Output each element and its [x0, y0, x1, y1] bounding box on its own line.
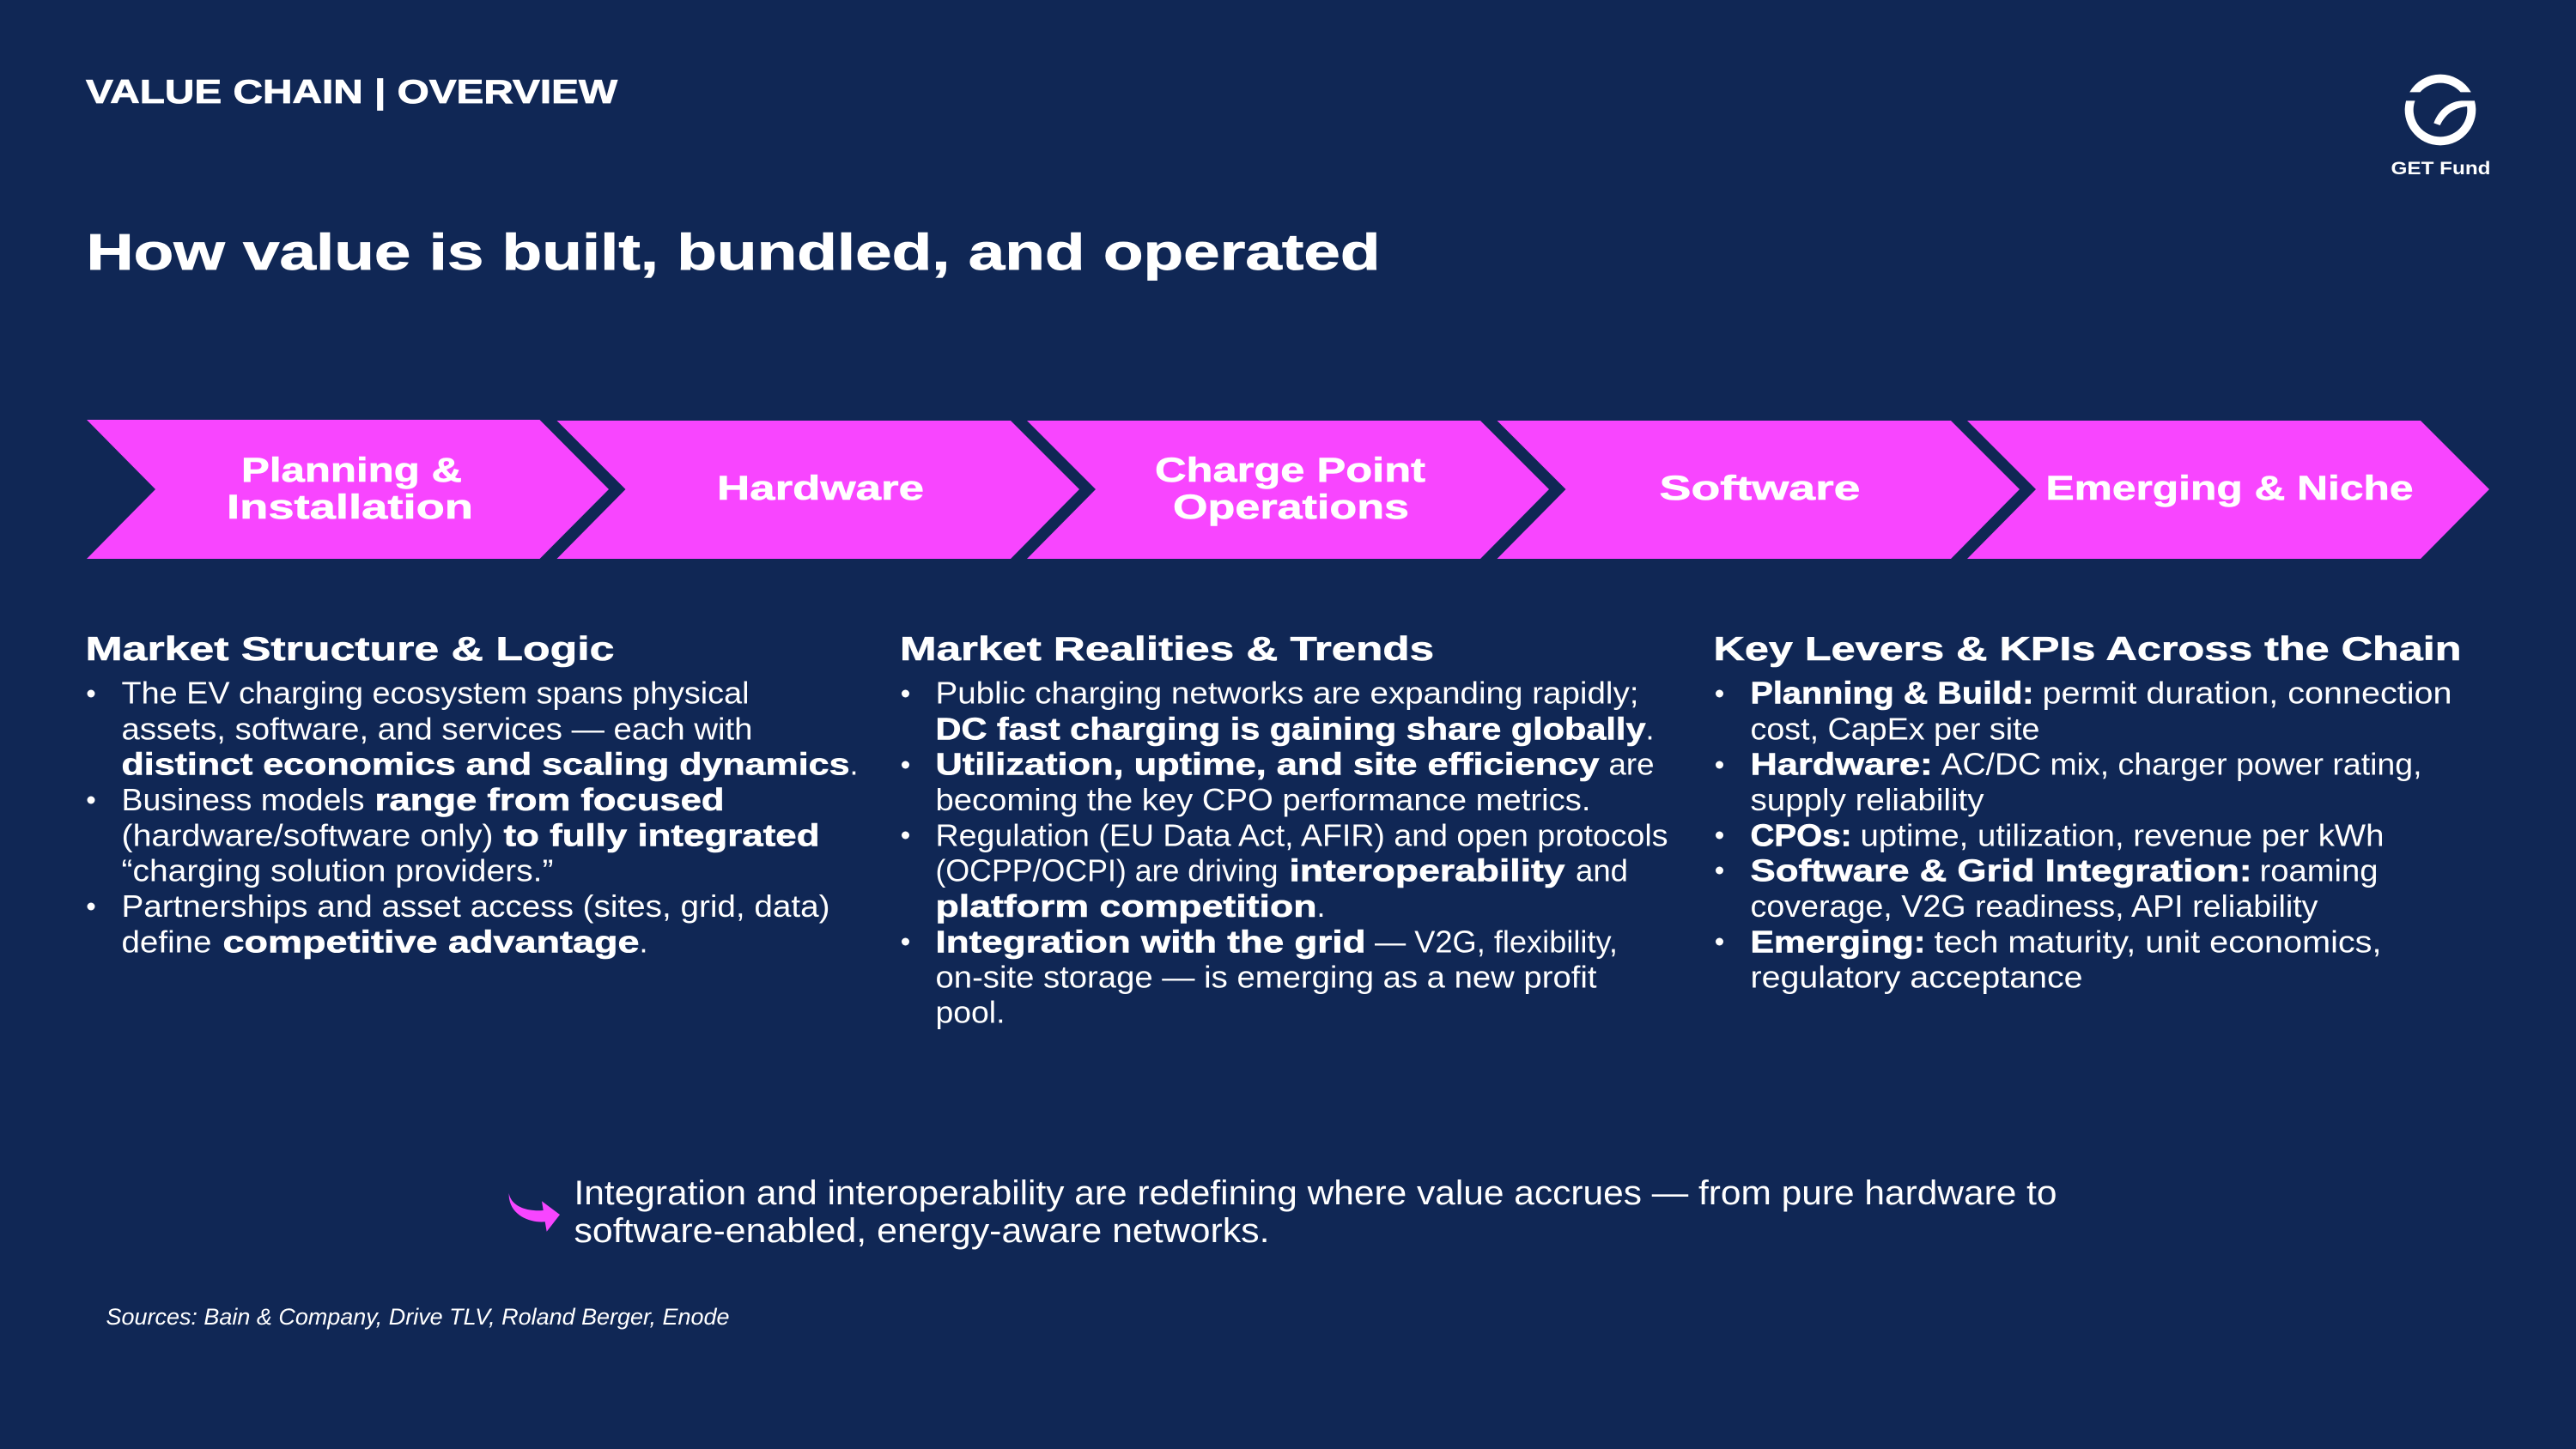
chevron: charge point operations: [1027, 421, 1549, 559]
bullet: grid integration: on-site storage — is emerging as a new profit: [936, 960, 1597, 994]
bullet: ecosystem: The EV charging ecosystem spans physical: [122, 675, 749, 711]
bullet: software and grid integration: [1716, 853, 2379, 924]
bullet: hardware: supply reliability: [1750, 782, 1984, 817]
takeaway callout: [574, 1174, 2057, 1250]
bullet: ecosystem: .: [850, 747, 859, 781]
heading: Market Realities & Trends: [900, 631, 1434, 668]
bullet: business models: [88, 782, 819, 888]
chevron: charge point operations: Charge Point: [1155, 452, 1425, 489]
takeaway callout: software-enabled, energy-aware networks.: [574, 1212, 1269, 1250]
bullet: planning and build: [1716, 675, 2452, 747]
bullet: hardware: AC/DC mix, charger power rating,: [1941, 747, 2421, 781]
chevron: emerging and niche: Emerging & Niche: [2045, 470, 2413, 507]
chevron: software: [1498, 421, 2020, 559]
value chain chevrons: [87, 420, 2489, 559]
bullet: utilization: becoming the key CPO performance metrics.: [936, 782, 1590, 817]
chevron: charge point operations: Operations: [1173, 488, 1409, 526]
bullet: CPOs: CPOs:: [1750, 817, 1851, 853]
bullet: ecosystem: [88, 675, 859, 781]
bullet: emerging: regulatory acceptance: [1750, 960, 2083, 994]
takeaway callout: Integration and interoperability are redefining where value accrues — from pure hardware to: [574, 1174, 2057, 1212]
bullet: software and grid integration: coverage, V2G readiness, API reliability: [1750, 888, 2318, 924]
chevron: planning and installation: Planning &: [241, 452, 462, 489]
chevron: planning and installation: Installation: [227, 488, 473, 526]
chevron: emerging and niche: [1967, 421, 2489, 559]
bullet: utilization: are: [1609, 747, 1654, 781]
panel: market realities and trends: [900, 631, 1668, 1030]
title: How value is built, bundled, and operated: [86, 224, 1381, 281]
bullet: utilization: Utilization, uptime, and site efficiency: [936, 747, 1599, 781]
section label: VALUE CHAIN | OVERVIEW: [86, 74, 617, 111]
bullet: grid integration: [902, 924, 1618, 1030]
bullet: planning and build: cost, CapEx per site: [1750, 711, 2040, 747]
bullet: ecosystem: assets, software, and services — each with: [122, 711, 752, 747]
chevron: planning and installation: [87, 420, 609, 559]
bullet: grid integration: pool.: [936, 994, 1005, 1030]
bullet: planning and build: Planning & Build:: [1750, 675, 2033, 711]
panel: key levers and KPIs: [1714, 631, 2461, 994]
bullet: business models: “charging solution providers.”: [122, 853, 553, 888]
bullet: business models: Business models: [122, 782, 364, 817]
bullet: regulation: interoperability: [1290, 853, 1564, 888]
bullet: partnerships: competitive advantage: [223, 924, 639, 960]
bullet: grid integration: Integration with the grid: [936, 924, 1365, 960]
bullet: software and grid integration: Software & Grid Integration:: [1750, 853, 2251, 888]
bullet: regulation: (OCPP/OCPI) are driving: [936, 853, 1278, 888]
bullet: grid integration: — V2G, flexibility,: [1375, 924, 1618, 960]
bullet: business models: to fully integrated: [503, 817, 819, 853]
chevron: hardware: [556, 421, 1079, 559]
bullet: emerging: tech maturity, unit economics,: [1934, 924, 2382, 960]
bullet: public charging: [902, 675, 1655, 747]
bullet: emerging: [1716, 924, 2382, 994]
heading: Key Levers & KPIs Across the Chain: [1714, 631, 2461, 668]
bullet: public charging: .: [1645, 711, 1655, 747]
bullet: partnerships: define: [122, 924, 211, 960]
bullet: planning and build: permit duration, connection: [2042, 675, 2452, 711]
bullet: regulation: .: [1317, 888, 1326, 924]
bullet: CPOs: uptime, utilization, revenue per kWh: [1860, 817, 2384, 853]
bullet: public charging: Public charging networks are expanding rapidly;: [936, 675, 1638, 711]
bullet: business models: (hardware/software only): [122, 817, 493, 853]
bullet: hardware: Hardware:: [1750, 747, 1932, 781]
bullet: utilization: [902, 747, 1654, 817]
heading: Market Structure & Logic: [86, 631, 615, 668]
logo: GET Fund: [2391, 75, 2490, 179]
bullet: regulation: [902, 817, 1668, 924]
panel: market structure and logic: [86, 631, 859, 960]
bullet: software and grid integration: roaming: [2260, 853, 2379, 888]
chevron: hardware: Hardware: [717, 470, 924, 507]
bullet: ecosystem: distinct economics and scaling dynamics: [122, 747, 850, 781]
bullet: hardware: [1716, 747, 2421, 817]
bullet: emerging: Emerging:: [1750, 924, 1925, 960]
sources: Sources: Bain & Company, Drive TLV, Roland Berger, Enode: [106, 1304, 730, 1330]
icon: curved arrow: [509, 1193, 560, 1232]
bullet: regulation: and: [1576, 853, 1628, 888]
bullet: regulation: Regulation (EU Data Act, AFIR) and open protocols: [936, 817, 1668, 853]
logo: GET Fund: GET Fund: [2391, 159, 2490, 179]
chevron: software: Software: [1659, 470, 1860, 507]
bullet: partnerships: .: [639, 924, 648, 960]
bullet: partnerships: [88, 888, 829, 960]
bullet: business models: range from focused: [374, 782, 725, 817]
bullet: partnerships: Partnerships and asset access (sites, grid, data): [122, 888, 829, 924]
bullet: public charging: DC fast charging is gaining share globally: [936, 711, 1645, 747]
bullet: regulation: platform competition: [936, 888, 1317, 924]
